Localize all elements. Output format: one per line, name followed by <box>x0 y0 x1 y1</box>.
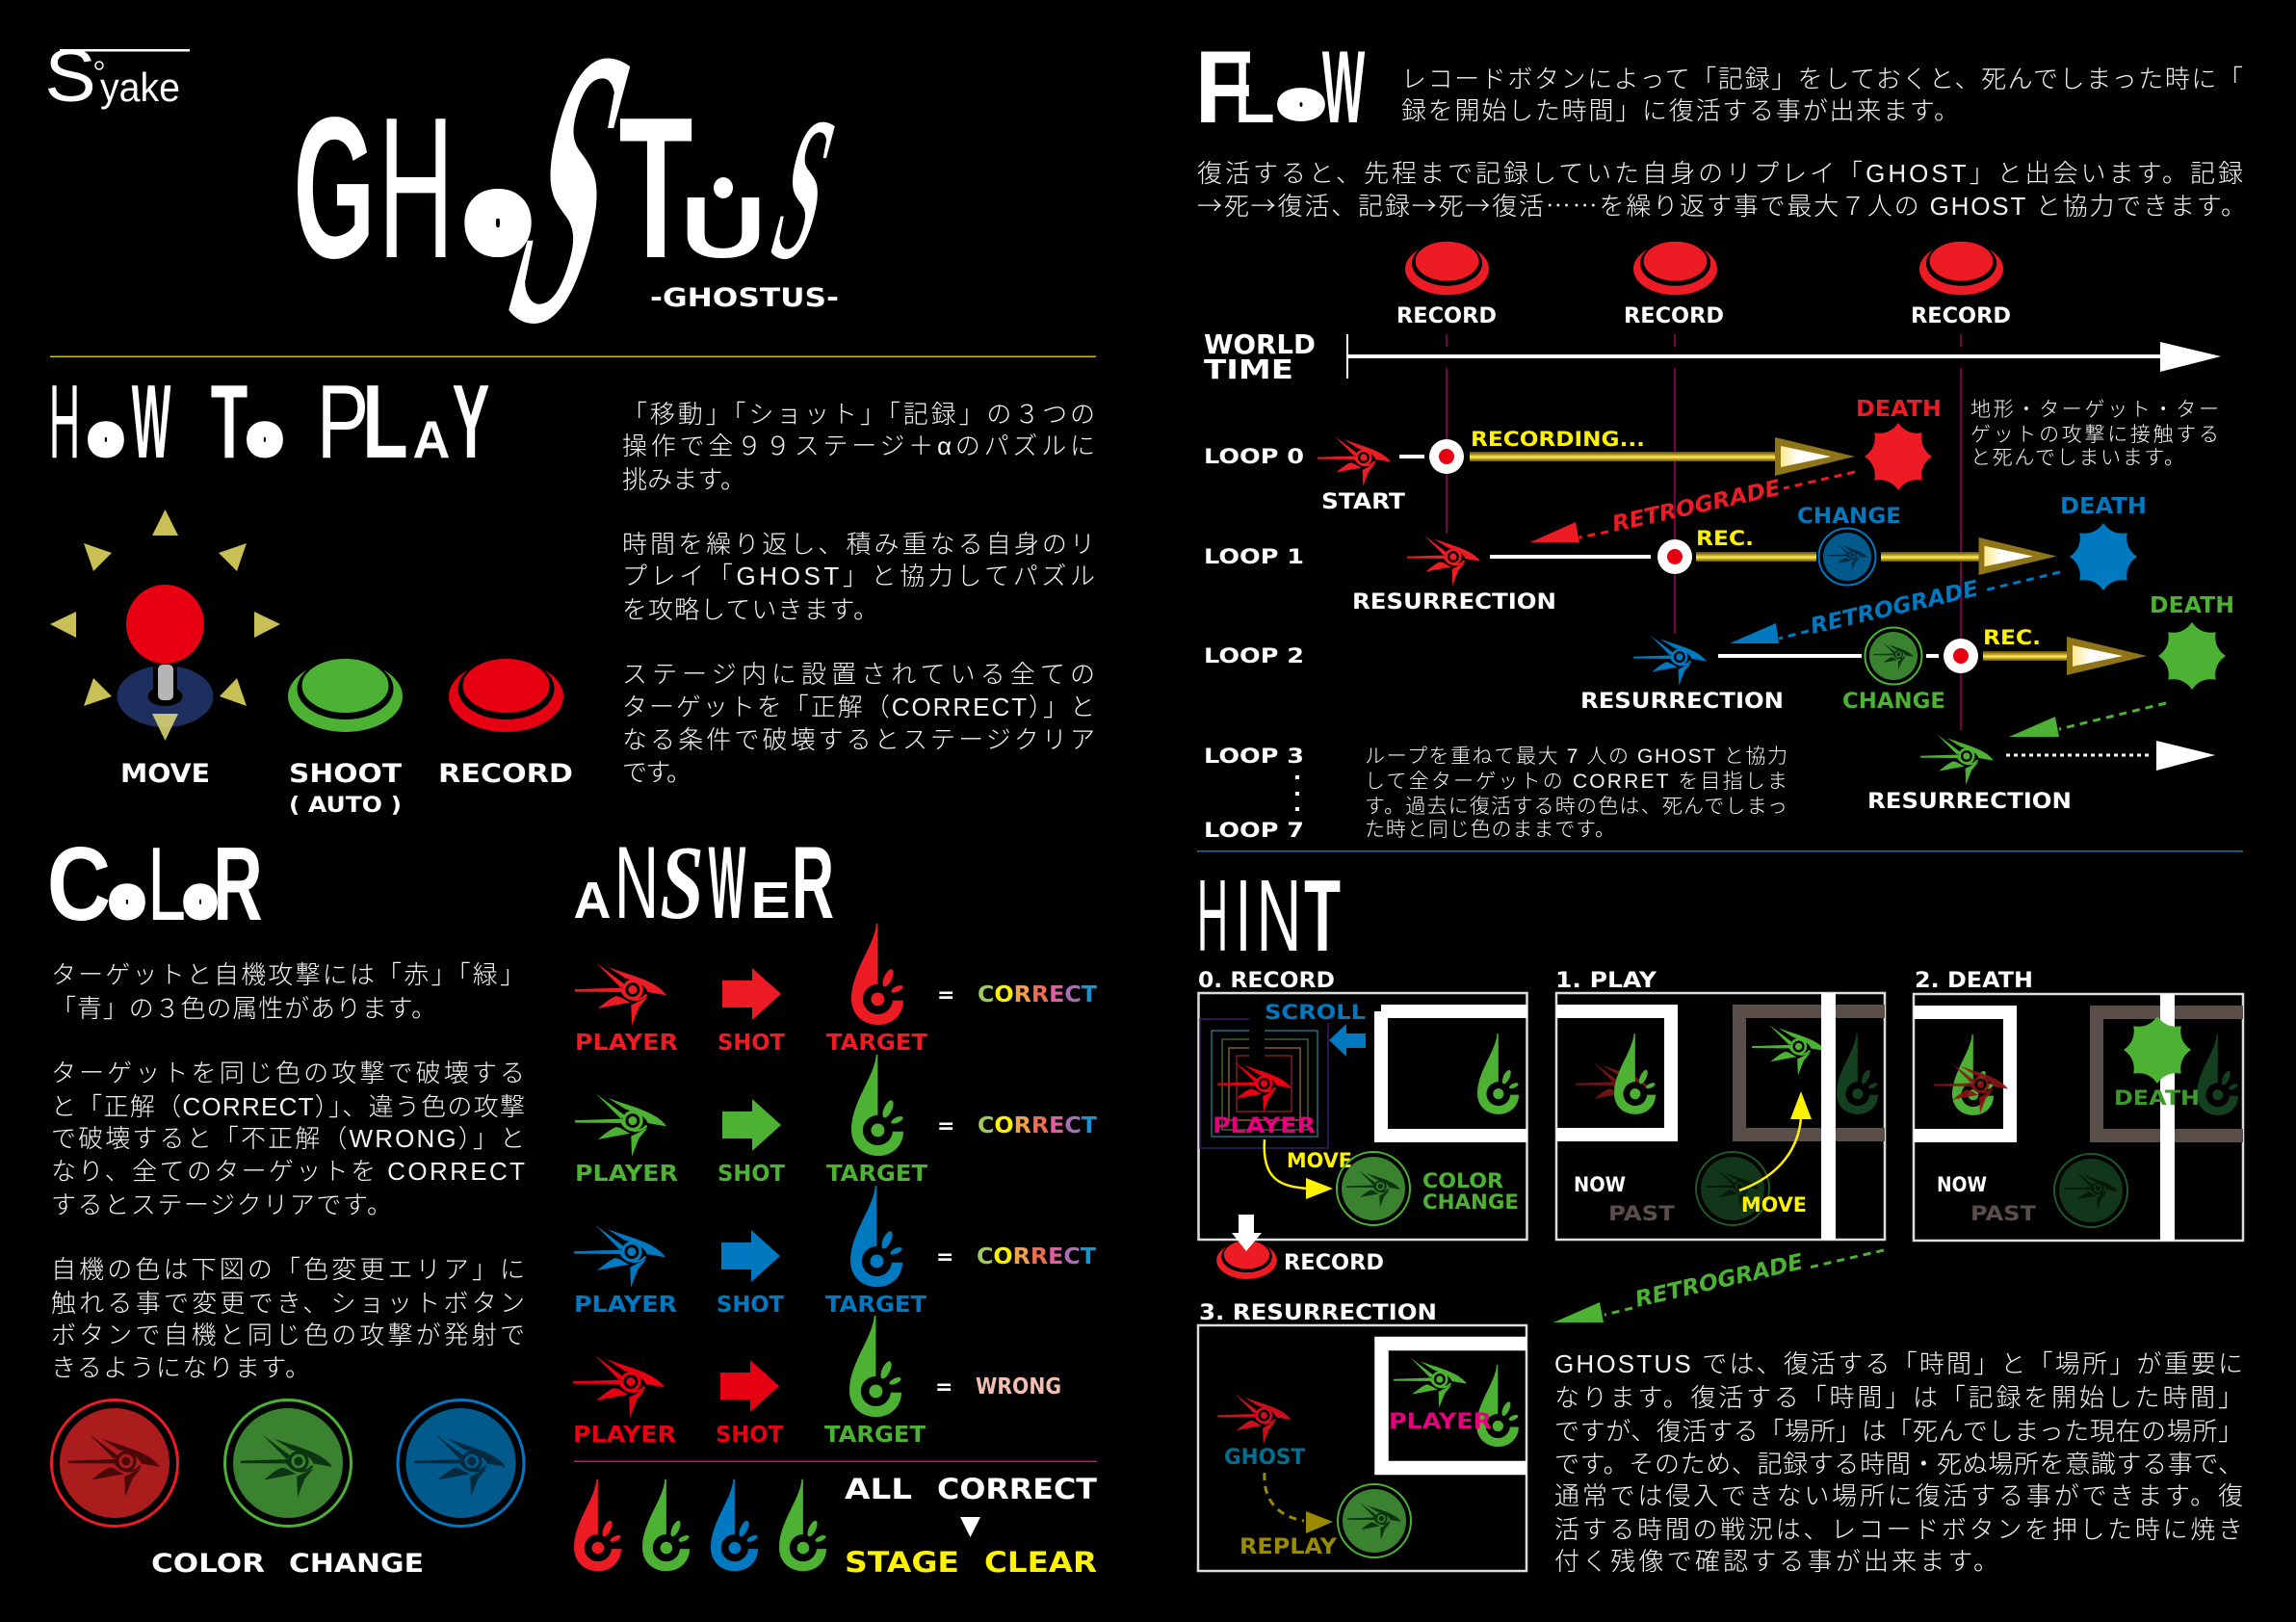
icon: blue color change area <box>398 1400 524 1526</box>
label: COLOR CHANGE: COLOR <box>1422 1169 1503 1192</box>
arrow: scroll <box>1329 1024 1366 1057</box>
text block: how to play: ステージ内に設置されている全ての <box>622 660 1095 689</box>
loop 2 row: REC. <box>1983 626 2041 649</box>
note: death: 地形・ターゲット・ター <box>1970 399 2219 421</box>
panel heading: 1. PLAY: 1. PLAY <box>1555 969 1657 993</box>
record button 1 <box>1396 241 1497 328</box>
panel heading: 2. DEATH: 2. DEATH <box>1915 969 2033 993</box>
heading: Answer <box>574 824 834 941</box>
arrow: red retrograde <box>1530 472 1855 542</box>
loop 0 row <box>1318 397 1942 514</box>
text block: color: ターゲットを同じ色の攻撃で破壊する <box>51 1059 525 1087</box>
subtitle: -GHOSTUS-: -GHOSTUS- <box>650 283 839 313</box>
loop 0 row: DEATH <box>1856 397 1942 422</box>
label: COLOR CHANGE: CHANGE <box>1422 1190 1519 1214</box>
icon: past change circle <box>2054 1154 2127 1227</box>
heading: Answer: E <box>750 872 791 929</box>
heading: How To Play: O <box>92 420 119 459</box>
heading: Color: R <box>213 826 263 943</box>
answer row: wrong <box>573 1316 1061 1448</box>
loop 0 row: START <box>1321 490 1405 514</box>
title: GHOSTUS logo: O <box>473 188 523 260</box>
panel heading: 0. RECORD: 0. RECORD <box>1198 969 1335 993</box>
record button 3: RECORD <box>1911 304 2011 328</box>
note: loops: た時と同じ色のままです。 <box>1365 819 1615 841</box>
arrow: world time axis <box>1346 334 2221 379</box>
label: ALL CORRECT <box>845 1473 1097 1505</box>
answer row: blue correct: = <box>936 1245 953 1269</box>
label: REPLAY: REPLAY <box>1239 1535 1338 1559</box>
text block: how to play: 「移動」「ショット」「記録」の３つの <box>622 400 1095 429</box>
loop labels: LOOP 3 <box>1204 745 1304 768</box>
loop 2 row: RESURRECTION <box>1580 690 1784 714</box>
label: PAST: PAST <box>1970 1202 2037 1225</box>
text block: color: と「正解（CORRECT）」、違う色の攻撃 <box>51 1092 525 1121</box>
note: death: ゲットの攻撃に接触する <box>1970 424 2219 446</box>
label: STAGE CLEAR <box>845 1546 1097 1579</box>
label: DEATH: DEATH <box>2114 1086 2200 1110</box>
heading: Flow: F <box>1194 29 1254 144</box>
heading: Flow: O <box>1283 87 1319 122</box>
icon: record button with press arrow <box>1216 1215 1277 1279</box>
text block: how to play: プレイ「GHOST」と協力してパズル <box>622 562 1095 590</box>
heading: How To Play: T <box>211 362 248 480</box>
answer row: wrong: WRONG <box>976 1374 1061 1400</box>
note: loops: ループを重ねて最大 7 人の GHOST と協力 <box>1365 746 1787 768</box>
title: GHOSTUS logo: H <box>378 76 454 301</box>
arrow: replay <box>1265 1473 1333 1533</box>
label: AUTO: ( AUTO ) <box>289 794 402 818</box>
text block: color: きるようになります。 <box>51 1353 310 1382</box>
answer row: green correct: SHOT <box>718 1162 785 1187</box>
note: loops: して全ターゲットの CORRET を目指しま <box>1365 771 1787 793</box>
icon: red color change area <box>52 1400 177 1526</box>
text block: flow intro <box>1197 65 2246 222</box>
timeline: vertical record markers <box>1447 334 1961 730</box>
answer row: red correct: PLAYER <box>575 1031 678 1056</box>
label: PLAYER: PLAYER <box>1213 1114 1316 1138</box>
answer row: green correct: = <box>937 1114 954 1138</box>
label: COLOR CHANGE <box>151 1549 424 1579</box>
arrow: green retrograde in hint <box>1553 1249 1884 1322</box>
heading: How To Play: P <box>317 364 369 481</box>
text block: how to play: ターゲットを「正解（CORRECT）」と <box>622 693 1095 721</box>
title: GHOSTUS logo <box>294 0 854 406</box>
icon: shoot button <box>288 658 403 732</box>
heading: How To Play: L <box>362 363 408 481</box>
loop labels: LOOP 0 <box>1204 445 1304 468</box>
text block: flow intro: →死→復活、記録→死→復活……を繰り返す事で最大７人の GHOST と協力できます。 <box>1197 187 2246 222</box>
heading: Color: O <box>188 882 213 922</box>
record button 3 <box>1911 241 2011 328</box>
loop 3 row <box>1867 735 2215 814</box>
heading: Answer: N <box>614 824 659 940</box>
panel: 0 record <box>1198 993 1527 1240</box>
heading: Answer: S <box>660 824 704 941</box>
icon: past change circle <box>1696 1152 1769 1225</box>
text block: hint: 付く残像で確認する事が出来ます。 <box>1554 1547 1998 1576</box>
label: RECORD: RECORD <box>1284 1251 1384 1275</box>
title: GHOSTUS logo: S <box>754 77 854 302</box>
answer row: wrong: SHOT <box>716 1423 783 1448</box>
text block: how to play: 挑みます。 <box>622 465 745 494</box>
icon: green color change area <box>225 1400 351 1526</box>
note: death <box>1970 399 2219 469</box>
icon: player <box>1217 1061 1292 1112</box>
answer row: blue correct: CORRECT <box>977 1244 1096 1269</box>
heading: Color: O <box>114 882 141 922</box>
text block: color: ターゲットと自機攻撃には「赤」「緑」 <box>51 960 525 989</box>
text block: how to play: なる条件で破壊するとステージクリア <box>622 725 1095 754</box>
heading: Answer: W <box>709 826 746 941</box>
text block: color: ボタンで自機と同じ色の攻撃が発射で <box>51 1321 525 1349</box>
answer row: red correct: = <box>937 983 954 1007</box>
text block: color <box>51 960 525 1382</box>
answer row: blue correct <box>574 1186 1096 1318</box>
answer row: red correct: TARGET <box>826 1031 927 1056</box>
text block: hint <box>1554 1349 2243 1576</box>
label: COLOR CHANGE <box>1422 1169 1519 1214</box>
label: MOVE: MOVE <box>1741 1193 1807 1216</box>
icon: down triangle <box>960 1517 980 1537</box>
text block: hint: です。そのため、記録する時間・死ぬ場所を意識する事で、 <box>1554 1450 2243 1478</box>
panel: 3 resurrection <box>1198 1325 1526 1571</box>
answer row: wrong: = <box>935 1375 952 1400</box>
loop 1 row: REC. <box>1696 527 1754 550</box>
heading: Color: C <box>47 826 111 943</box>
answer row: green correct <box>575 1055 1097 1187</box>
arrow: move <box>1739 1091 1812 1190</box>
label: WORLD TIME <box>1204 328 1316 385</box>
loop 2 row: CHANGE <box>1842 690 1945 714</box>
text block: color: 「青」の３色の属性があります。 <box>51 994 436 1023</box>
answer row: green correct: CORRECT <box>978 1113 1097 1138</box>
answer row: red correct: CORRECT <box>978 982 1097 1007</box>
heading: Answer: R <box>792 825 834 940</box>
record button 1: RECORD <box>1396 304 1497 328</box>
text block: flow intro: 録を開始した時間」に復活する事が出来ます。 <box>1401 96 1959 125</box>
heading: Hint: H <box>1197 859 1228 973</box>
label: COLOR CHANGE: COLOR <box>151 1549 265 1579</box>
label: STAGE CLEAR: STAGE <box>845 1546 959 1579</box>
label: COLOR CHANGE: CHANGE <box>289 1549 424 1579</box>
arrow: blue retrograde <box>1730 572 2060 643</box>
note: loops <box>1365 746 1787 841</box>
text block: flow intro: 復活すると、先程まで記録していた自身のリプレイ「GHOST」と出会います。記録 <box>1197 159 2243 188</box>
text block: hint: 活する時間の戦況は、レコードボタンを押した時に焼き <box>1554 1515 2243 1544</box>
text block: hint: なります。復活する「時間」は「記録を開始した時間」 <box>1554 1383 2243 1412</box>
text block: color: で破壊すると「不正解（WRONG）」と <box>51 1124 525 1153</box>
heading: How To Play: O <box>251 420 278 459</box>
text block: how to play: 時間を繰り返し、積み重なる自身のリ <box>622 530 1095 559</box>
panel heading: 3. RESURRECTION: 3. RESURRECTION <box>1199 1301 1437 1325</box>
text block: how to play: です。 <box>622 758 691 787</box>
answer row: blue correct: PLAYER <box>574 1293 677 1318</box>
label: NOW: NOW <box>1574 1173 1626 1196</box>
panel: 1 play <box>1556 993 1885 1240</box>
label: SHOOT: SHOOT <box>289 759 403 789</box>
loop 1 row <box>1352 494 2147 615</box>
heading: Hint: T <box>1304 859 1341 973</box>
icon: color change <box>1338 1484 1411 1557</box>
answer row: blue correct: TARGET <box>825 1293 926 1318</box>
loop labels: LOOP 1 <box>1204 545 1304 568</box>
icons: four targets <box>574 1479 827 1571</box>
heading: Color <box>47 824 263 943</box>
arrow: green retrograde <box>2009 703 2166 737</box>
text block: how to play: を攻略していきます。 <box>622 595 878 624</box>
heading: Hint <box>1197 858 1341 973</box>
heading: Color: L <box>147 824 186 943</box>
label: PLAYER: PLAYER <box>1389 1410 1492 1434</box>
heading: Flow: L <box>1233 30 1275 145</box>
loop 2 row <box>1580 593 2234 714</box>
logo: Syake <box>44 34 190 118</box>
title: GHOSTUS logo: T <box>619 75 692 301</box>
heading: How To Play: H <box>49 363 80 481</box>
heading: Flow: W <box>1322 29 1365 144</box>
heading: Hint: N <box>1257 858 1301 973</box>
heading: How To Play <box>49 362 489 481</box>
answer row: red correct: SHOT <box>718 1031 785 1056</box>
loop 3 row: RESURRECTION <box>1867 790 2072 814</box>
answer row: red correct <box>575 924 1097 1056</box>
logo: Syake: yake <box>100 65 180 110</box>
label: MOVE: MOVE <box>1287 1149 1352 1172</box>
text block: color: するとステージクリアです。 <box>51 1190 392 1219</box>
loop 1 row: RESURRECTION <box>1352 590 1556 615</box>
text block: color: なり、全てのターゲットを CORRECT <box>51 1157 525 1186</box>
label: PAST: PAST <box>1608 1202 1676 1225</box>
label: ALL CORRECT: ALL <box>845 1473 912 1505</box>
text block: how to play: 操作で全９９ステージ＋αのパズルに <box>622 432 1095 460</box>
loop 0 row: RECORDING... <box>1471 428 1645 451</box>
heading: Answer: A <box>573 872 612 929</box>
loop labels <box>1204 445 1304 842</box>
icon: color change <box>1337 1152 1410 1225</box>
label: ALL CORRECT: CORRECT <box>937 1473 1097 1505</box>
label: MOVE: MOVE <box>120 759 210 789</box>
label: NOW: NOW <box>1937 1173 1987 1196</box>
answer row: green correct: TARGET <box>826 1162 927 1187</box>
arrow: green retrograde in hint: RETROGRADE <box>1633 1249 1806 1313</box>
heading: How To Play: Y <box>453 362 489 481</box>
arrow: blue retrograde: RETROGRADE <box>1809 576 1981 640</box>
icon: ghost player <box>1217 1394 1292 1444</box>
loop labels: LOOP 2 <box>1204 644 1304 667</box>
note: death: と死んでしまいます。 <box>1970 447 2184 469</box>
heading: How To Play: A <box>413 410 450 469</box>
answer row: green correct: PLAYER <box>575 1162 678 1187</box>
label: GHOST: GHOST <box>1224 1446 1305 1470</box>
text block: color: 自機の色は下図の「色変更エリア」に <box>51 1255 525 1284</box>
note: loops: す。過去に復活する時の色は、死んでしまっ <box>1365 796 1787 818</box>
loop 1 row: DEATH <box>2060 494 2147 519</box>
label: WORLD TIME: WORLD <box>1204 328 1316 360</box>
loop 1 row: CHANGE <box>1797 505 1901 529</box>
panel: 2 death <box>1914 994 2243 1241</box>
label: SCROLL: SCROLL <box>1265 1001 1366 1024</box>
answer row: blue correct: SHOT <box>717 1293 784 1318</box>
heading: How To Play: W <box>132 362 171 481</box>
title: GHOSTUS logo: G <box>294 76 375 301</box>
record button 2 <box>1624 241 1724 328</box>
label: RECORD: RECORD <box>438 759 573 789</box>
text block: color: 触れる事で変更でき、ショットボタン <box>51 1289 525 1318</box>
arrow: red retrograde: RETROGRADE <box>1610 476 1783 537</box>
heading: Flow <box>1194 29 1365 145</box>
label: STAGE CLEAR: CLEAR <box>984 1546 1097 1579</box>
loop labels: LOOP 7 <box>1204 819 1304 842</box>
icon: joystick with eight direction arrows <box>50 510 280 741</box>
text block: hint: GHOSTUS では、復活する「時間」と「場所」が重要に <box>1554 1349 2243 1378</box>
answer row: wrong: TARGET <box>824 1423 926 1448</box>
logo: Syake: S <box>44 34 96 118</box>
answer row: wrong: PLAYER <box>573 1423 676 1448</box>
text block: hint: ですが、復活する「場所」は「死んでしまった現在の場所」 <box>1554 1417 2243 1446</box>
title: GHOSTUS logo: U <box>680 179 767 275</box>
heading: Hint: I <box>1236 859 1251 973</box>
arrow: move <box>1265 1139 1333 1199</box>
icon: record button <box>449 658 563 732</box>
text block: how to play <box>622 400 1095 787</box>
loop 2 row: DEATH <box>2150 593 2234 618</box>
record button 2: RECORD <box>1624 304 1724 328</box>
text block: flow intro: レコードボタンによって「記録」をしておくと、死んでしまった時に「 <box>1401 65 2243 93</box>
text block: hint: 通常では侵入できない場所に復活する事ができます。復 <box>1554 1481 2243 1510</box>
label: WORLD TIME: TIME <box>1204 353 1293 385</box>
